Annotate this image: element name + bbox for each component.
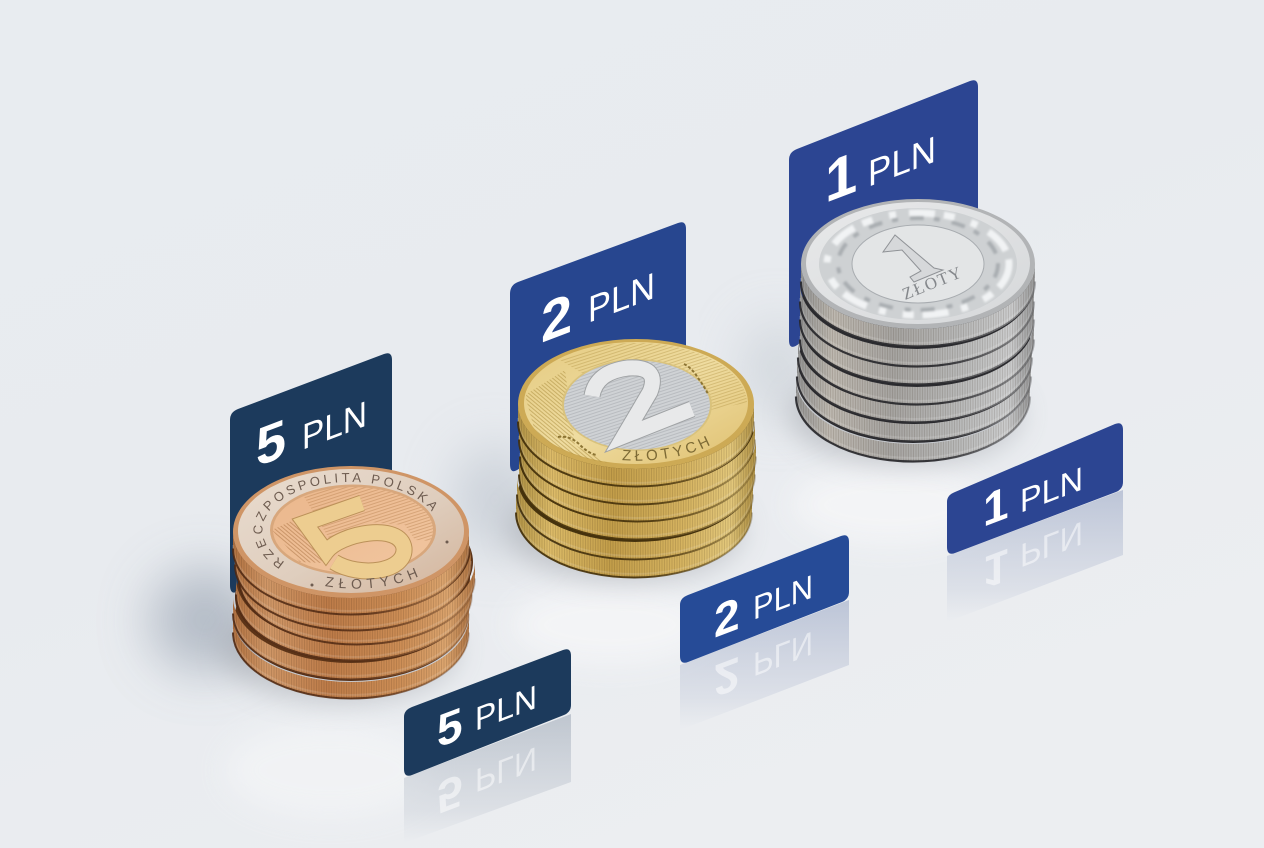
tall flag: 5 PLN: 5 (256, 406, 286, 479)
reflection: 5 PLN label (404, 714, 571, 843)
reflection: 1 PLN label: 1 (983, 538, 1009, 599)
tall flag: 2 PLN: 2 (541, 282, 572, 356)
floor shadows and reflections (150, 320, 990, 818)
shadow at stack base (222, 598, 458, 702)
reflection: 2 PLN label: PLN (753, 623, 813, 683)
floor label: 5 PLN: PLN (475, 678, 537, 739)
floor label: 2 PLN: 2 (714, 588, 740, 649)
coin face: 2 zlote: ZŁOTYCH (622, 436, 710, 461)
tall flag: 1 PLN: PLN (868, 128, 936, 196)
shadow at stack base (789, 365, 1021, 465)
floor label: 1 PLN: 1 (983, 477, 1009, 538)
coin face: 2 zlote (518, 339, 754, 469)
shadow at stack base (507, 478, 743, 582)
tall flag: 2 PLN: PLN (588, 265, 655, 332)
coin stack: 1 PLN (789, 199, 1035, 465)
coin stack: 2 PLN (502, 339, 757, 593)
reflection: 1 PLN label: PLN (1020, 513, 1083, 574)
coin edges (796, 200, 1035, 462)
floor label: 1 PLN (947, 423, 1123, 554)
reflection: 2 PLN label: 2 (714, 646, 740, 707)
tall flag: 5 PLN (230, 353, 392, 593)
reflection: 1 PLN label (947, 490, 1123, 622)
reflection: 5 PLN label: PLN (475, 739, 537, 799)
coin face: 5 zlotych: RZECZPOSPOLITA POLSKA (253, 473, 436, 569)
floor label: 5 PLN (404, 649, 571, 776)
coin edges (233, 467, 475, 699)
tall flag: 2 PLN (510, 222, 686, 471)
coin face: 1 zloty (801, 199, 1035, 329)
coin edges (516, 340, 756, 578)
coin face: 5 zlotych: ZŁOTYCH (325, 568, 418, 589)
floor label: 2 PLN: PLN (753, 568, 813, 628)
floor label: 5 PLN: 5 (437, 698, 463, 759)
coin stack: 5 PLN (219, 466, 476, 713)
tall flag: 1 PLN (789, 80, 978, 347)
floor label: 2 PLN (680, 535, 849, 663)
tall flag: 1 PLN: 1 (825, 139, 857, 216)
reflection: 5 PLN label: 5 (437, 763, 463, 824)
coin face: 1 zloty: ZŁOTY (899, 262, 966, 304)
reflection: 2 PLN label (680, 600, 849, 730)
tall flag: 5 PLN: PLN (302, 392, 367, 458)
floor label: 1 PLN: PLN (1020, 460, 1083, 521)
coin face: 5 zlotych (233, 466, 469, 598)
